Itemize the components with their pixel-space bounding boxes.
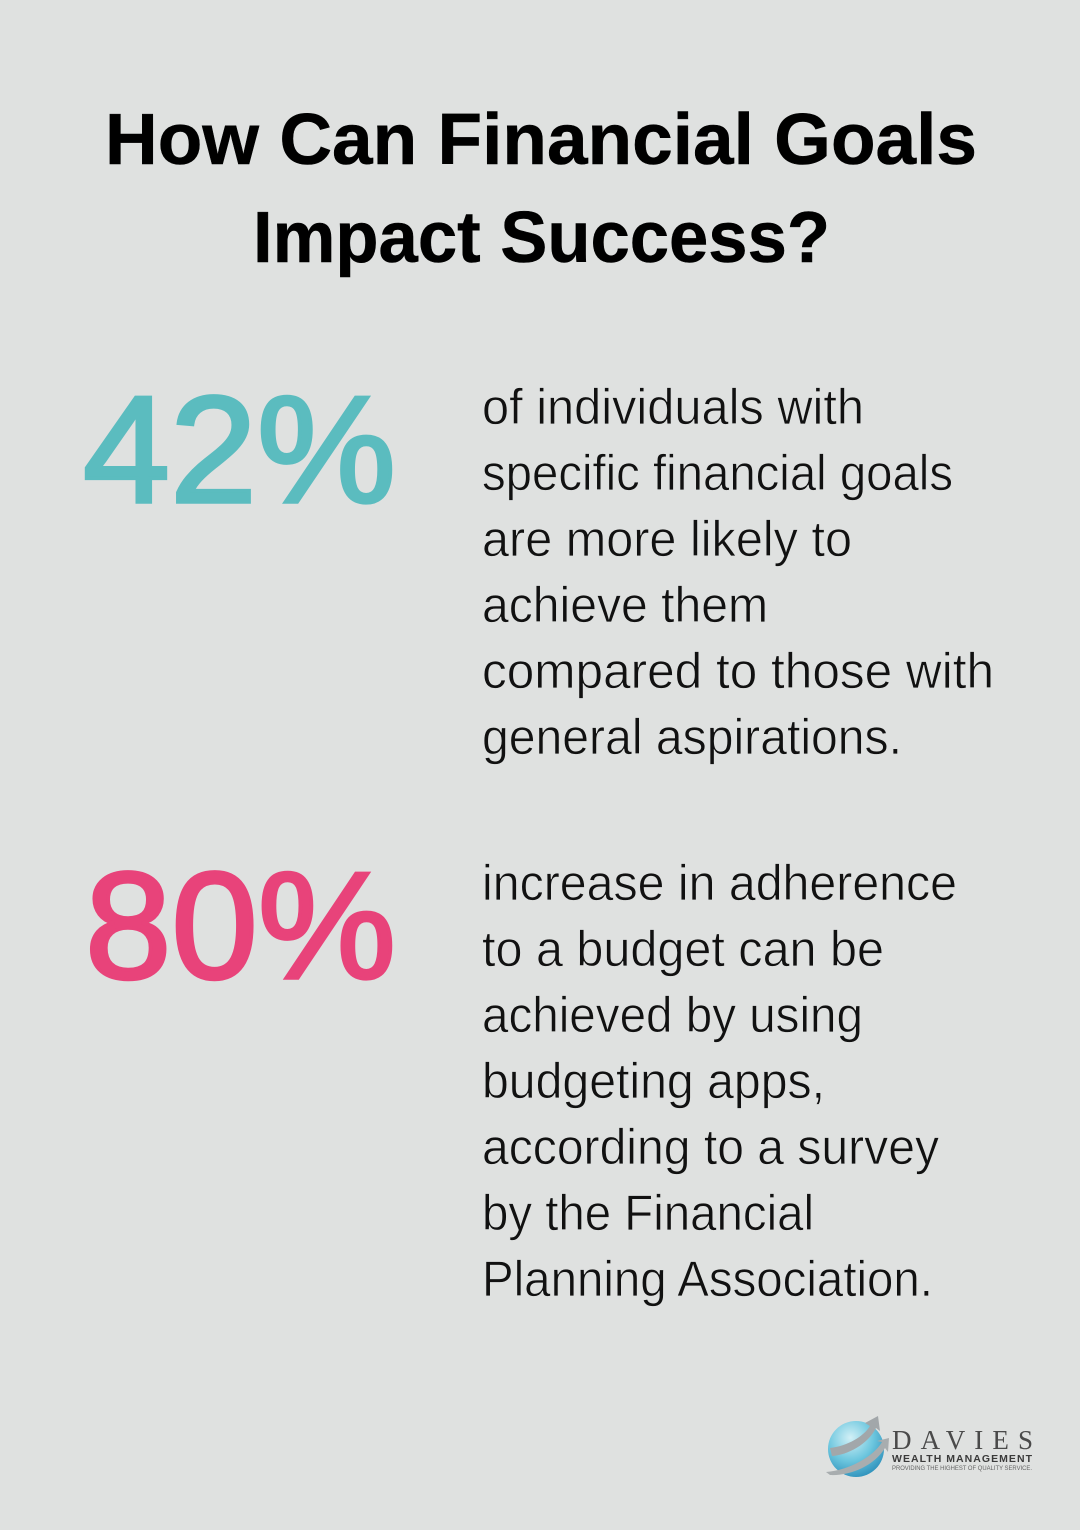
text block: 42% description: general aspirations.: [482, 709, 902, 765]
text block: 42% description: specific financial goals: [482, 445, 953, 501]
text block: 42% description: of individuals with: [482, 379, 864, 435]
text block: 80% description: [482, 855, 957, 1307]
title: [105, 100, 977, 278]
text block: 80% description: budgeting apps,: [482, 1053, 825, 1109]
stat: 80%: 80%: [85, 841, 396, 1011]
text block: 42% description: [482, 379, 994, 765]
icon: globe with arrows: [826, 1416, 889, 1477]
text block: 42% description: compared to those with: [482, 643, 994, 699]
text block: 42% description: achieve them: [482, 577, 768, 633]
title: Impact Success?: [253, 198, 830, 278]
stat: 42%: 42%: [83, 365, 396, 535]
text block: 80% description: increase in adherence: [482, 855, 957, 911]
logo: Davies Wealth Management: [826, 1416, 1033, 1477]
text block: 42% description: are more likely to: [482, 511, 852, 567]
text block: 80% description: achieved by using: [482, 987, 863, 1043]
wordmark: DAVIES: [892, 1425, 1033, 1455]
text block: 80% description: by the Financial: [482, 1185, 814, 1241]
text block: 80% description: according to a survey: [482, 1119, 939, 1175]
tagline: wealth management: WEALTH MANAGEMENT: [892, 1453, 1033, 1465]
text block: 80% description: to a budget can be: [482, 921, 884, 977]
text block: 80% description: Planning Association.: [482, 1251, 933, 1307]
title: How Can Financial Goals: [105, 100, 977, 180]
tagline: service: PROVIDING THE HIGHEST OF QUALITY SERVICE.: [892, 1465, 1032, 1472]
